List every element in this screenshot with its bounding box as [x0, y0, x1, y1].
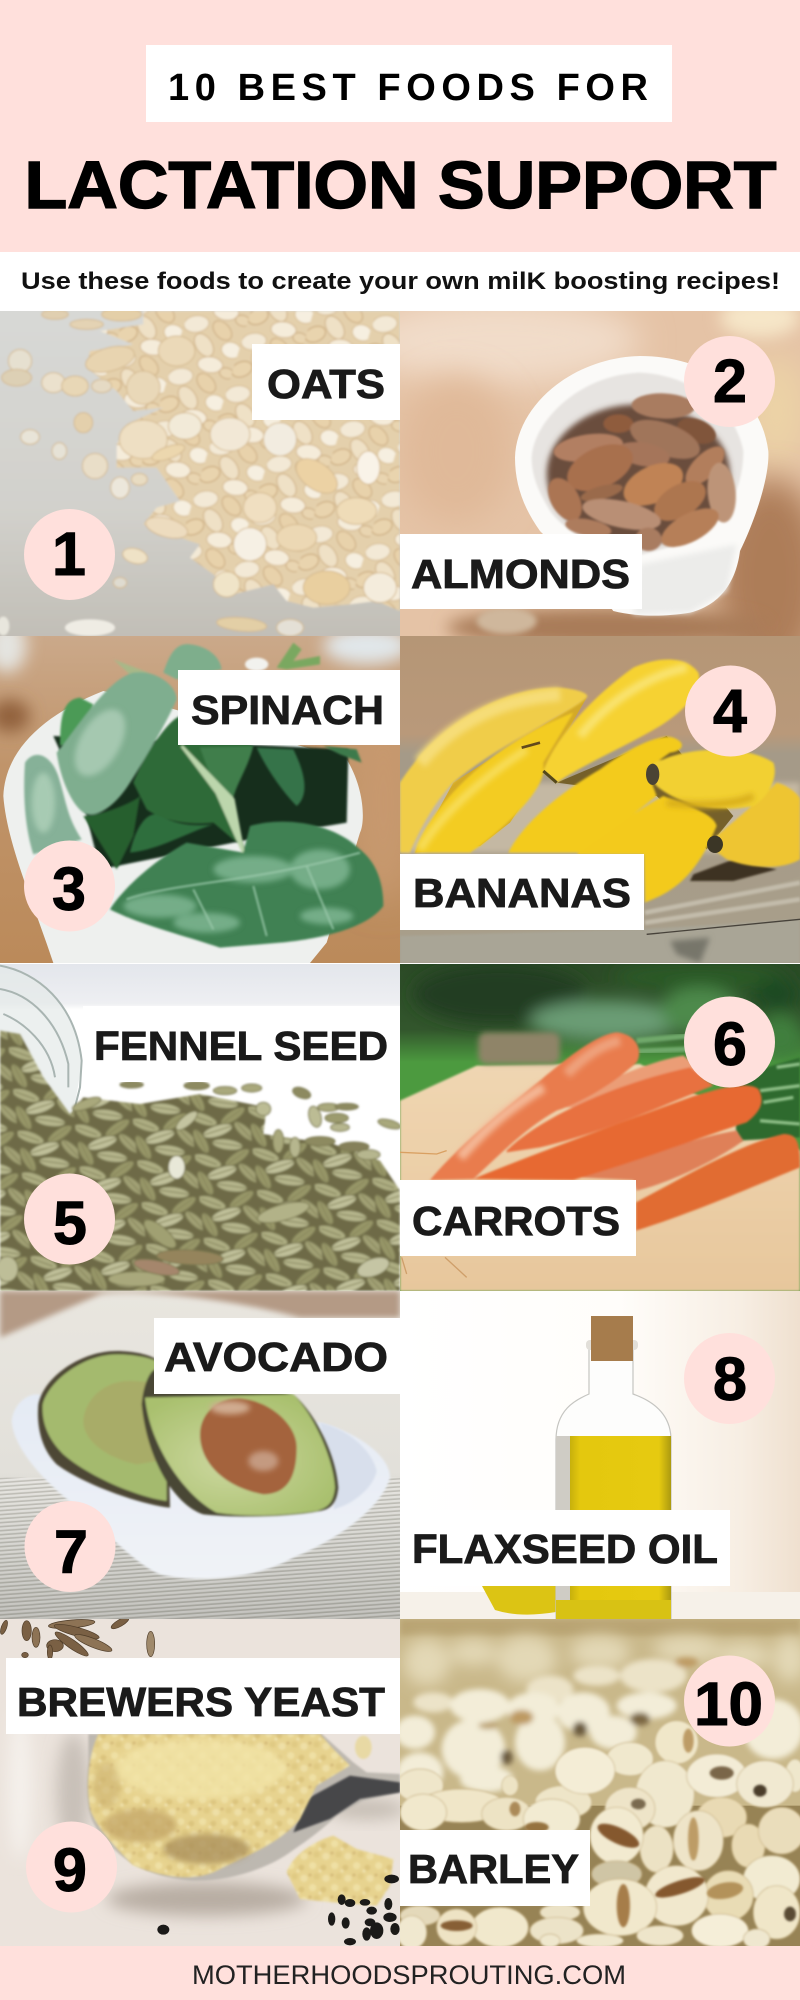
header banner	[0, 0, 800, 252]
number badge 3	[24, 840, 115, 932]
number badge 5	[24, 1174, 115, 1264]
footer: MOTHERHOODSPROUTING.COM	[192, 1960, 626, 1990]
number badge 10	[684, 1656, 775, 1746]
footer	[0, 1946, 800, 2000]
subtitle	[0, 252, 800, 311]
panel: bananas	[400, 636, 800, 963]
number badge 9	[26, 1822, 117, 1912]
number badge 2: 2	[713, 347, 747, 415]
label: SPINACH: SPINACH	[191, 687, 384, 733]
label: BREWERS YEAST	[6, 1658, 400, 1734]
panel: almonds	[400, 311, 800, 636]
label: AVOCADO	[154, 1318, 400, 1394]
label: OATS	[252, 344, 400, 420]
panel: flaxseed oil	[400, 1291, 800, 1619]
number badge 10: 10	[694, 1670, 763, 1738]
label: SPINACH	[178, 670, 400, 745]
label: FLAXSEED OIL: FLAXSEED OIL	[412, 1526, 718, 1572]
panel: oats	[0, 301, 410, 646]
panel: carrots	[400, 964, 800, 1291]
title line: 10 best foods for: 10 BEST FOODS FOR	[168, 67, 648, 109]
panel: fennel seed	[0, 964, 402, 1291]
label: FENNEL SEED: FENNEL SEED	[94, 1023, 388, 1069]
number badge 8: 8	[713, 1345, 747, 1413]
number badge 4	[685, 666, 776, 756]
subtitle: Use these foods to create your own milK boosting recipes!	[21, 268, 780, 295]
number badge 4: 4	[713, 677, 747, 745]
label: ALMONDS: ALMONDS	[411, 551, 630, 597]
number badge 9: 9	[53, 1836, 87, 1904]
number badge 7: 7	[54, 1518, 88, 1586]
label: BANANAS	[400, 854, 644, 930]
label: FLAXSEED OIL	[400, 1510, 730, 1586]
photo: bananas	[400, 636, 800, 963]
label: BARLEY: BARLEY	[408, 1846, 579, 1892]
photo: carrots	[400, 964, 800, 1291]
title line: lactation support: LACTATION SUPPORT	[24, 148, 777, 223]
photo: fennel seed	[0, 964, 402, 1291]
number badge 1: 1	[52, 520, 86, 588]
panel: avocado	[0, 1291, 400, 1619]
label: BREWERS YEAST: BREWERS YEAST	[17, 1679, 385, 1725]
number badge 1	[24, 509, 115, 600]
photo: barley	[395, 1619, 800, 1949]
number badge 8	[684, 1333, 775, 1424]
number badge 6: 6	[713, 1010, 747, 1078]
photo: oats	[0, 301, 410, 646]
label: BARLEY	[400, 1830, 590, 1906]
number badge 7	[24, 1501, 116, 1592]
panel: barley	[395, 1619, 800, 1949]
label: CARROTS: CARROTS	[412, 1198, 620, 1244]
panel: spinach	[0, 619, 417, 963]
label: OATS: OATS	[267, 361, 385, 407]
number badge 5: 5	[53, 1189, 87, 1257]
label: AVOCADO: AVOCADO	[164, 1334, 388, 1380]
label: ALMONDS	[400, 534, 642, 609]
panel: brewers yeast	[0, 1615, 407, 1946]
photo: avocado	[0, 1291, 400, 1619]
label: BANANAS: BANANAS	[413, 870, 631, 916]
photo: spinach	[0, 619, 417, 963]
label: FENNEL SEED	[83, 1006, 400, 1082]
number badge 3: 3	[52, 855, 86, 923]
photo: brewers yeast	[0, 1615, 407, 1946]
number badge 2	[684, 336, 775, 427]
photo: almonds	[400, 311, 800, 636]
photo: flaxseed oil	[400, 1291, 800, 1619]
number badge 6	[684, 996, 775, 1088]
label: CARROTS	[400, 1180, 636, 1256]
title line: 10 best foods for	[146, 45, 672, 122]
